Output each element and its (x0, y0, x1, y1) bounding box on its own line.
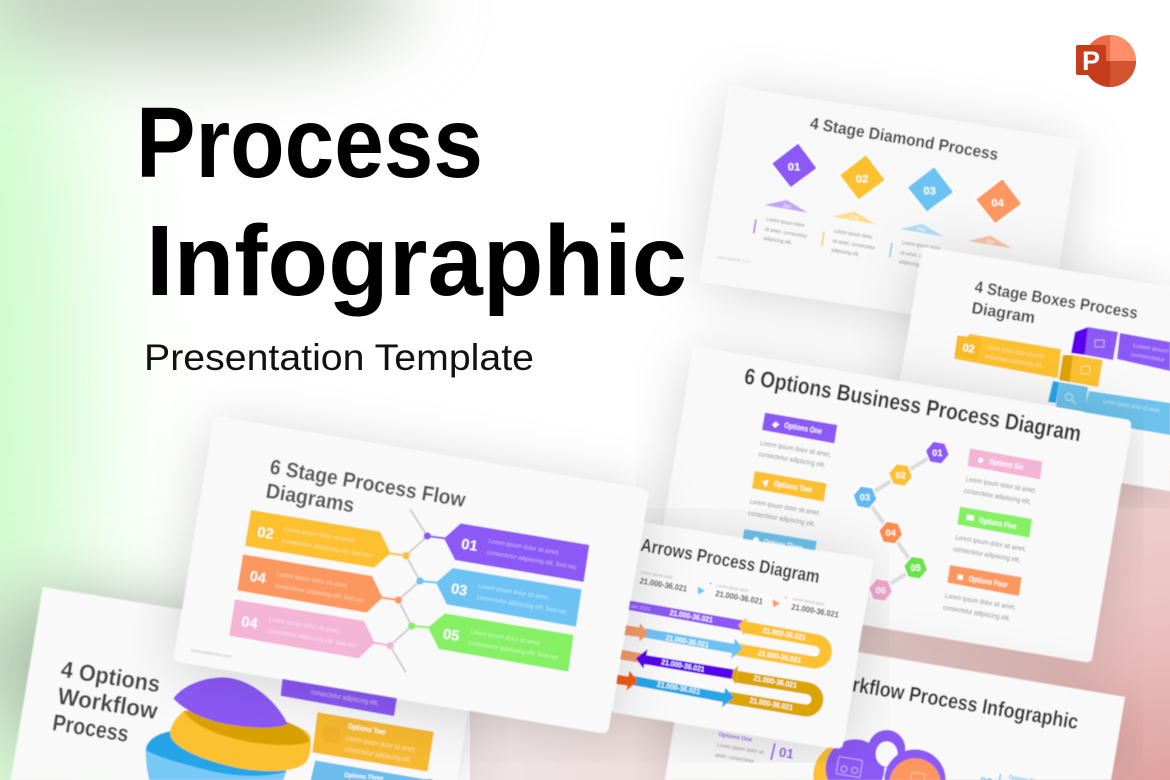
heading: arrows slide: Arrows Process Diagram (639, 534, 821, 587)
blue arrow with orange tail (623, 623, 743, 659)
main title (136, 87, 687, 317)
stat one: Lorem ipsum dolor (640, 569, 674, 580)
dark yellow U arrow: 21.000-36.021 (753, 673, 798, 690)
number 02 (979, 774, 1041, 780)
text column 1 (754, 217, 808, 246)
stage 01 band: consectetur adipiscing elit. Sed nec (486, 550, 577, 571)
option two box: Lorem ipsum dolor sit amet, (345, 735, 416, 754)
stage 05 band: consectetur adipiscing elit. Sed nec (468, 640, 559, 661)
month triangle Mar (900, 224, 944, 237)
stage 05 band (408, 613, 574, 672)
heading: workflow slide: Workflow (56, 683, 160, 724)
option one text: Options One (718, 732, 753, 744)
option three box (312, 762, 433, 780)
sky blue arrow with orange tail (616, 671, 734, 707)
option five (953, 507, 1032, 564)
month triangle Jan: Jan (782, 203, 792, 210)
website footer: www.website.com (717, 254, 751, 264)
option two box (313, 713, 433, 770)
hexagon 01 (923, 440, 951, 465)
slide card: 4 Options Workflow Process (11, 587, 476, 780)
hexagon 03 (851, 485, 879, 510)
purple band: Jan 2021 (630, 603, 651, 613)
heading: boxes slide: Diagram (970, 299, 1036, 327)
option six (963, 448, 1042, 506)
stage 01 band: 01 (460, 537, 479, 555)
option two (747, 471, 827, 528)
arrow: orange marker (773, 596, 787, 607)
stat two (715, 583, 764, 606)
yellow box row: consectetur adipiscing elit, (985, 354, 1043, 370)
option one text: amet, consectetur (715, 752, 755, 765)
icon: PowerPoint logo: P (1082, 46, 1100, 76)
hexagon 02 (887, 462, 915, 488)
text column 2 (822, 228, 876, 258)
diamond 03 (907, 166, 954, 213)
option three: Options Three (763, 537, 804, 553)
option two box: Options Two (347, 721, 387, 737)
slide card: 4 Stage Diamond Process (700, 87, 1078, 335)
stage 04 orange band: 04 (248, 569, 268, 587)
purple band: 21.000-36.021 (669, 608, 714, 625)
arrow: blue marker (698, 582, 712, 595)
text column 3: adipiscing elit, (898, 259, 928, 270)
month triangle Mar: Mar (916, 226, 927, 234)
heading: boxes slide: 4 Stage Boxes Process (973, 278, 1139, 323)
diamond 02 (839, 154, 886, 201)
main title: Infographic (146, 205, 687, 317)
heading: workflow slide: Process (51, 709, 131, 747)
option one: Lorem ipsum dolor sit amet, (760, 440, 832, 459)
diamond 01: 01 (788, 162, 800, 174)
stage 04 orange band: consectetur adipiscing elit. Sed nec (274, 583, 365, 604)
option six: Lorem ipsum dolor sit amet, (965, 476, 1037, 495)
month triangle Apr (968, 236, 1012, 248)
number 01: 01 (778, 745, 796, 762)
text column 2: Lorem ipsum dolor (833, 228, 873, 241)
stage 02 band: Lorem ipsum dolor sit amet, (284, 527, 356, 545)
option one: consectetur adipiscing elit, (758, 451, 826, 469)
stage 03 band: Lorem ipsum dolor sit amet, (478, 584, 550, 602)
hexagon 03: 03 (860, 493, 870, 503)
option four: Lorem ipsum dolor sit amet, (944, 593, 1016, 612)
text column 3: Lorem ipsum dolor (901, 240, 941, 253)
stage 05 band: 05 (442, 626, 460, 645)
purple cube and band: Lorem ipsum (1133, 343, 1170, 355)
diamond 04: 04 (991, 198, 1005, 210)
heading: flow slide: 6 Stage Process Flow (268, 456, 468, 512)
slide card: Workflow Process Infographic (665, 624, 1125, 780)
slide card: 4 Stage Boxes Process Diagram (890, 247, 1170, 491)
stat two: Lorem ipsum dolor (716, 583, 750, 593)
stage 04 pink band: consectetur adipiscing elit. Sed nec (266, 628, 357, 649)
hexagon 05 (902, 555, 930, 580)
stacked blob: blue layer (146, 731, 287, 780)
option two: Options Two (773, 479, 813, 494)
blue cube and band (1048, 381, 1170, 435)
diamond 04 (975, 178, 1022, 224)
website footer: www.website.com (190, 648, 232, 660)
text column 1: Lorem ipsum dolor (766, 217, 805, 229)
stage 01 band (424, 523, 589, 582)
option two: Lorem ipsum dolor sit amet, (749, 498, 821, 517)
yellow U arrow (737, 617, 826, 665)
stage 04 pink band: Lorem ipsum dolor sit amet, (268, 617, 341, 635)
option one: Options One (784, 421, 823, 436)
option five: consectetur adipiscing elit, (953, 546, 1021, 564)
month triangle Feb: Feb (849, 215, 859, 222)
text column 2: sit amet, consectetur (832, 238, 876, 252)
text column 2: adipiscing elit, (831, 247, 860, 258)
option five: Lorem ipsum dolor sit amet, (955, 534, 1027, 553)
yellow cube (1059, 355, 1103, 387)
option three (741, 529, 817, 560)
text column 1: sit amet, consectetur (764, 227, 808, 240)
option four: consectetur adipiscing elit, (942, 604, 1011, 623)
stat two: 21.000-36.021 (715, 588, 764, 606)
month triangle Apr: Apr (986, 239, 995, 246)
option two box: consectetur adipiscing elit, (344, 746, 411, 764)
stat three: Lorem ipsum dolor (792, 596, 825, 607)
yellow U arrow: 21.000-36.021 (762, 626, 807, 642)
option four: Options Four (968, 574, 1008, 590)
month triangle Jan (764, 200, 808, 213)
text column 1: adipiscing elit, (763, 236, 792, 246)
yellow box row (955, 335, 1060, 377)
stage 03 band (416, 568, 582, 627)
diamond 03: 03 (923, 185, 936, 197)
zigzag spine (390, 509, 427, 673)
stage 04 pink band (229, 599, 394, 658)
connector line (865, 453, 937, 590)
diamond 02: 02 (856, 173, 868, 185)
heading: options slide: 6 Options Business Process Diagram (742, 363, 1083, 446)
stage 02 band (245, 510, 410, 568)
stage 01 band: Lorem ipsum dolor sit amet, (488, 539, 560, 557)
month triangle Feb (832, 212, 876, 224)
slide card: 6 Stage Process Flow Diagrams (174, 417, 649, 734)
blue arrow with orange tail: 21.000-36.021 (665, 633, 710, 650)
sky blue arrow with orange tail: 21.000-36.021 (656, 680, 702, 696)
stage 03 band: 03 (450, 581, 468, 600)
text column 3: sit amet, consectetur (900, 250, 944, 263)
heading: workflow infographic slide: Workflow Process Infographic (824, 669, 1080, 734)
option four (942, 565, 1022, 623)
stat one (639, 569, 688, 594)
option five: Options Five (978, 516, 1018, 531)
heading: diamond slide: 4 Stage Diamond Process (809, 114, 1000, 164)
stat three: 21.000-36.021 (791, 601, 840, 620)
subtitle: Presentation Template (144, 337, 534, 378)
dark purple arrow with orange tail: 21.000-36.021 (661, 657, 706, 674)
stat one: 21.000-36.021 (639, 575, 688, 594)
dark purple arrow with orange tail (619, 649, 733, 679)
yellow U arrow: 21.000-36.021 (757, 648, 803, 665)
option one box (282, 673, 397, 715)
slide card: Arrows Process Diagram (609, 522, 873, 749)
stage 03 band: consectetur adipiscing elit. Sed nec (476, 595, 567, 616)
yellow box row: Lorem ipsum dolor sit amet, (987, 345, 1045, 361)
option one text: Lorem ipsum dolor sit (716, 742, 764, 756)
option one text (715, 732, 764, 765)
option six: consectetur adipiscing elit, (963, 488, 1031, 506)
stage 05 band: Lorem ipsum dolor sit amet, (470, 629, 542, 647)
text column 3 (890, 240, 944, 270)
hexagon 05: 05 (910, 563, 921, 573)
circle cluster (813, 730, 946, 780)
purple cube and band (1071, 327, 1170, 371)
stage 02 band: 02 (256, 525, 275, 543)
yellow box row: 02 (961, 342, 976, 356)
option six: Options Six (989, 457, 1025, 472)
stage 02 band: consectetur adipiscing elit. Sed nec (282, 538, 372, 559)
hexagon 04 (877, 520, 905, 545)
stage 04 orange band (237, 554, 402, 613)
icon: PowerPoint logo (1076, 35, 1136, 87)
main title: Process (136, 87, 483, 199)
hexagon 06: 06 (875, 585, 886, 595)
option one box: consectetur adipiscing elit, (310, 689, 379, 707)
stacked blob: yellow layer (170, 711, 311, 771)
stacked blob: purple layer (173, 677, 287, 728)
stage 04 orange band: Lorem ipsum dolor sit amet, (276, 572, 349, 590)
heading: workflow slide (51, 656, 162, 747)
stat three (791, 596, 840, 620)
dark yellow U arrow: 21.000-36.021 (749, 696, 794, 712)
option two: consectetur adipiscing elit, (747, 510, 816, 528)
slide card: 6 Options Business Process Diagram (653, 347, 1132, 663)
hexagon 02: 02 (895, 470, 906, 480)
number 01 (771, 743, 796, 762)
hexagon 06 (867, 577, 895, 603)
heading: workflow slide: 4 Options (59, 656, 162, 697)
heading: flow slide: Diagrams (264, 480, 356, 517)
hexagon 01: 01 (932, 448, 943, 458)
option one (758, 413, 837, 469)
hexagon 04: 04 (885, 528, 897, 538)
purple cube and band: consectetur (1131, 352, 1165, 364)
purple band (625, 600, 744, 631)
dark yellow U arrow (728, 666, 817, 712)
diamond 01 (771, 142, 818, 188)
stage 04 pink band: 04 (240, 614, 260, 633)
